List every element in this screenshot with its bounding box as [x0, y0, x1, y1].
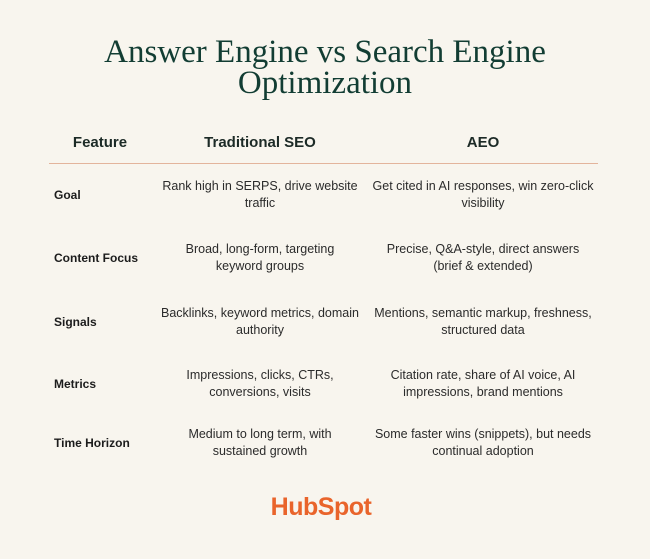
seo: keyword groups	[216, 259, 304, 273]
aeo	[391, 368, 575, 399]
aeo: (brief & extended)	[433, 259, 533, 273]
title: Answer Engine vs Search Engine	[104, 34, 546, 70]
row: Time Horizon	[54, 427, 591, 458]
header: AEO: AEO	[467, 134, 499, 151]
seo: conversions, visits	[209, 385, 311, 399]
aeo: impressions, brand mentions	[403, 385, 563, 399]
title: Optimization	[238, 65, 412, 101]
label: Content Focus	[54, 251, 138, 265]
seo	[186, 242, 334, 273]
seo: Broad, long-form, targeting	[186, 242, 334, 256]
row: Content Focus	[54, 242, 579, 273]
aeo: Mentions, semantic markup, freshness,	[374, 306, 592, 320]
aeo: continual adoption	[432, 444, 534, 458]
row: Goal	[54, 179, 594, 210]
label: Time Horizon	[54, 436, 130, 450]
label: Metrics	[54, 377, 96, 391]
seo: Impressions, clicks, CTRs,	[186, 368, 334, 382]
seo: authority	[236, 323, 284, 337]
aeo: Citation rate, share of AI voice, AI	[391, 368, 575, 382]
aeo: Get cited in AI responses, win zero-click visibility	[373, 179, 593, 210]
title	[104, 34, 546, 101]
seo: Rank high in SERPS, drive website traffic	[162, 179, 358, 210]
row: Metrics	[54, 368, 575, 399]
aeo	[374, 306, 592, 337]
label: Goal	[54, 188, 81, 202]
label: Signals	[54, 315, 97, 329]
seo	[186, 368, 334, 399]
logo: HubSpot: HubSpot	[271, 493, 371, 521]
seo	[161, 306, 359, 337]
aeo: Precise, Q&A-style, direct answers	[387, 242, 579, 256]
row: Signals	[54, 306, 592, 337]
seo: sustained growth	[213, 444, 307, 458]
header: Feature: Feature	[73, 134, 127, 151]
aeo	[375, 427, 591, 458]
seo: Medium to long term, with	[188, 427, 332, 441]
seo	[188, 427, 332, 458]
seo: Backlinks, keyword metrics, domain	[161, 306, 359, 320]
header: Traditional SEO: Traditional SEO	[204, 134, 316, 151]
aeo: structured data	[441, 323, 525, 337]
aeo	[387, 242, 579, 273]
aeo: Some faster wins (snippets), but needs	[375, 427, 591, 441]
